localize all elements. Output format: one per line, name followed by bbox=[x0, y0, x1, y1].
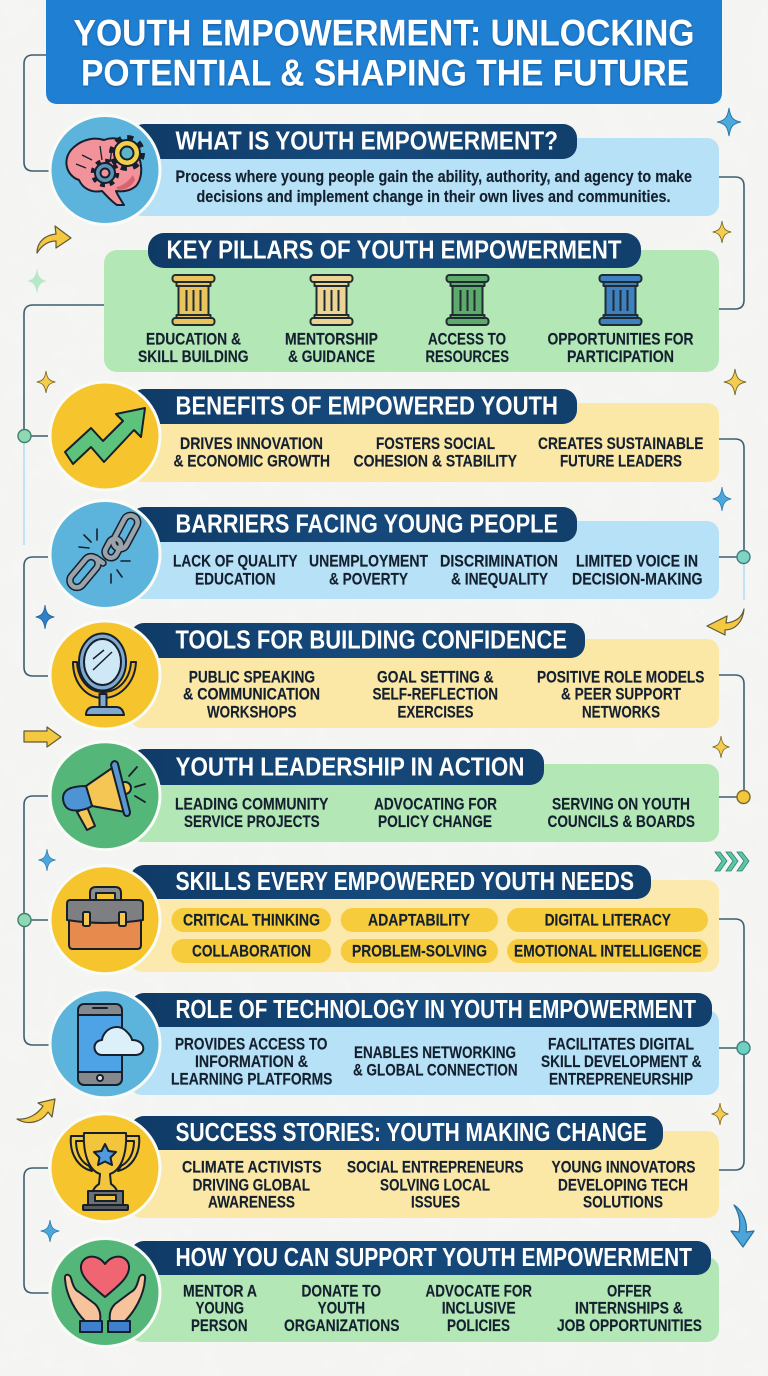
pillar: education bbox=[138, 275, 248, 366]
barrier items: EDUCATION bbox=[195, 569, 276, 588]
pillar: participation bbox=[548, 275, 694, 366]
tool items: & PEER SUPPORT bbox=[561, 684, 681, 703]
benefit items: COHESION & STABILITY bbox=[354, 451, 518, 470]
technology items: ENABLES NETWORKING bbox=[354, 1043, 516, 1062]
support items: INCLUSIVE bbox=[442, 1299, 516, 1318]
barrier items: LIMITED VOICE IN bbox=[576, 551, 698, 570]
technology items: LEARNING PLATFORMS bbox=[171, 1070, 332, 1089]
panel: what is youth empowerment bbox=[50, 116, 719, 224]
pillar: education: SKILL BUILDING bbox=[138, 347, 248, 366]
leadership items: LEADING COMMUNITY bbox=[175, 794, 329, 813]
technology items: & GLOBAL CONNECTION bbox=[353, 1060, 518, 1079]
panel: benefits bbox=[50, 382, 719, 490]
support items: YOUTH bbox=[318, 1299, 365, 1318]
benefit items: FOSTERS SOCIAL bbox=[376, 434, 495, 453]
panel: success stories bbox=[50, 1114, 719, 1222]
decorative stars and arrows bbox=[17, 108, 754, 1247]
barrier items: & POVERTY bbox=[329, 569, 409, 588]
icon: megaphone bbox=[50, 742, 160, 850]
success items: DRIVING GLOBAL bbox=[193, 1175, 310, 1194]
barrier items: DISCRIMINATION bbox=[440, 551, 558, 570]
definition text: Process where young people gain the ability, authority, and agency to make bbox=[176, 168, 692, 186]
panel: how you can support bbox=[50, 1238, 719, 1346]
panel: barriers bbox=[50, 500, 719, 608]
technology items: FACILITATES DIGITAL bbox=[548, 1034, 694, 1053]
leadership items: ADVOCATING FOR bbox=[374, 794, 497, 813]
tool items bbox=[183, 667, 704, 721]
heading: benefits bbox=[130, 389, 577, 424]
benefit items: DRIVES INNOVATION bbox=[180, 434, 323, 453]
support items bbox=[183, 1281, 702, 1335]
benefit items: FUTURE LEADERS bbox=[560, 451, 682, 470]
icon: brain with gears bbox=[50, 116, 160, 224]
technology items: ENTREPRENEURSHIP bbox=[549, 1070, 693, 1089]
pillar: education: EDUCATION & bbox=[146, 329, 241, 348]
definition text: decisions and implement change in their own lives and communities. bbox=[196, 188, 670, 206]
success items: YOUNG INNOVATORS bbox=[552, 1158, 696, 1177]
tool items: WORKSHOPS bbox=[207, 702, 296, 721]
tool items: POSITIVE ROLE MODELS bbox=[537, 667, 704, 686]
technology items bbox=[171, 1034, 702, 1089]
barrier items: LACK OF QUALITY bbox=[173, 551, 298, 570]
heading: barriers bbox=[130, 507, 577, 542]
heading: leadership: YOUTH LEADERSHIP IN ACTION bbox=[176, 753, 524, 781]
support items: ORGANIZATIONS bbox=[284, 1316, 400, 1335]
heading: what is youth empowerment: WHAT IS YOUTH EMPOWERMENT? bbox=[176, 127, 558, 155]
heading: success stories: SUCCESS STORIES: YOUTH MAKING CHANGE bbox=[176, 1119, 647, 1147]
barrier items bbox=[173, 551, 702, 588]
tool items: SELF-REFLECTION bbox=[372, 684, 498, 703]
success items: CLIMATE ACTIVISTS bbox=[182, 1158, 322, 1177]
leadership items bbox=[175, 794, 695, 831]
technology items: PROVIDES ACCESS TO bbox=[175, 1034, 328, 1053]
benefit items bbox=[174, 434, 704, 470]
leadership items: SERVICE PROJECTS bbox=[184, 812, 320, 831]
success items: SOCIAL ENTREPRENEURS bbox=[347, 1158, 524, 1177]
tool items: & COMMUNICATION bbox=[183, 684, 320, 703]
pillar: resources bbox=[426, 275, 509, 366]
support items: MENTOR A bbox=[183, 1281, 257, 1300]
support items: YOUNG bbox=[196, 1299, 244, 1318]
heading: skills bbox=[130, 865, 651, 899]
icon: broken chain bbox=[50, 500, 160, 608]
pillar: resources: RESOURCES bbox=[426, 347, 509, 366]
benefit items: CREATES SUSTAINABLE bbox=[538, 434, 704, 453]
leadership items: POLICY CHANGE bbox=[378, 812, 492, 831]
success items bbox=[182, 1158, 696, 1212]
barrier items: DECISION-MAKING bbox=[572, 569, 702, 588]
heading: what is youth empowerment bbox=[130, 124, 577, 159]
pillar: mentorship bbox=[285, 275, 378, 366]
support items: DONATE TO bbox=[302, 1281, 381, 1300]
pillar: resources: ACCESS TO bbox=[428, 329, 506, 348]
skill pills: EMOTIONAL INTELLIGENCE bbox=[514, 941, 702, 960]
heading: leadership bbox=[130, 749, 544, 785]
technology items: INFORMATION & bbox=[195, 1052, 308, 1071]
title banner bbox=[46, 0, 722, 104]
skill pills: CRITICAL THINKING bbox=[183, 910, 320, 929]
tool items: NETWORKS bbox=[582, 702, 660, 721]
success items: AWARENESS bbox=[208, 1193, 295, 1212]
success items: SOLUTIONS bbox=[583, 1193, 663, 1212]
panel: skills bbox=[50, 865, 719, 974]
pillar: mentorship: MENTORSHIP bbox=[285, 329, 378, 348]
skill pills: DIGITAL LITERACY bbox=[545, 910, 672, 929]
heading: success stories bbox=[130, 1116, 663, 1150]
technology items: SKILL DEVELOPMENT & bbox=[541, 1052, 702, 1071]
support items: ADVOCATE FOR bbox=[426, 1281, 532, 1300]
title banner: YOUTH EMPOWERMENT: UNLOCKING bbox=[74, 12, 694, 53]
benefit items: & ECONOMIC GROWTH bbox=[174, 451, 330, 470]
skill pills: PROBLEM-SOLVING bbox=[352, 941, 487, 960]
title banner: POTENTIAL & SHAPING THE FUTURE bbox=[81, 52, 689, 93]
panel: leadership bbox=[50, 742, 719, 850]
icon: hands holding heart bbox=[50, 1238, 160, 1346]
pillar: participation: PARTICIPATION bbox=[567, 347, 674, 366]
pillar: participation: OPPORTUNITIES FOR bbox=[548, 329, 694, 348]
tool items: PUBLIC SPEAKING bbox=[189, 667, 315, 686]
panel: key pillars bbox=[104, 233, 719, 372]
skill pills bbox=[172, 908, 708, 963]
tool items: EXERCISES bbox=[398, 702, 474, 721]
leadership items: SERVING ON YOUTH bbox=[552, 794, 690, 813]
heading: benefits: BENEFITS OF EMPOWERED YOUTH bbox=[176, 392, 558, 420]
support items: POLICIES bbox=[447, 1316, 510, 1335]
icon: briefcase bbox=[50, 866, 160, 974]
support items: JOB OPPORTUNITIES bbox=[557, 1316, 702, 1335]
icon: trophy bbox=[50, 1114, 160, 1222]
barrier items: UNEMPLOYMENT bbox=[309, 551, 429, 570]
icon: mirror bbox=[50, 621, 160, 729]
heading: barriers: BARRIERS FACING YOUNG PEOPLE bbox=[176, 510, 558, 538]
panel: technology bbox=[50, 990, 719, 1098]
support items: PERSON bbox=[191, 1316, 248, 1335]
panel: tools bbox=[50, 621, 719, 729]
support items: OFFER bbox=[607, 1281, 652, 1300]
success items: DEVELOPING TECH bbox=[558, 1175, 688, 1194]
success items: ISSUES bbox=[411, 1193, 460, 1212]
heading: tools: TOOLS FOR BUILDING CONFIDENCE bbox=[176, 626, 567, 654]
pillar: mentorship: & GUIDANCE bbox=[288, 347, 375, 366]
heading: tools bbox=[130, 623, 585, 658]
heading: skills: SKILLS EVERY EMPOWERED YOUTH NEEDS bbox=[176, 868, 634, 896]
success items: SOLVING LOCAL bbox=[380, 1175, 490, 1194]
definition text bbox=[176, 168, 692, 206]
skill pills: COLLABORATION bbox=[192, 941, 311, 960]
skill pills: ADAPTABILITY bbox=[368, 910, 471, 929]
icon: phone and cloud bbox=[50, 990, 160, 1098]
support items: INTERNSHIPS & bbox=[575, 1299, 683, 1318]
barrier items: & INEQUALITY bbox=[451, 569, 549, 588]
heading: key pillars: KEY PILLARS OF YOUTH EMPOWERMENT bbox=[166, 236, 622, 264]
leadership items: COUNCILS & BOARDS bbox=[548, 812, 695, 831]
icon: growth arrow bbox=[50, 382, 160, 490]
tool items: GOAL SETTING & bbox=[377, 667, 494, 686]
